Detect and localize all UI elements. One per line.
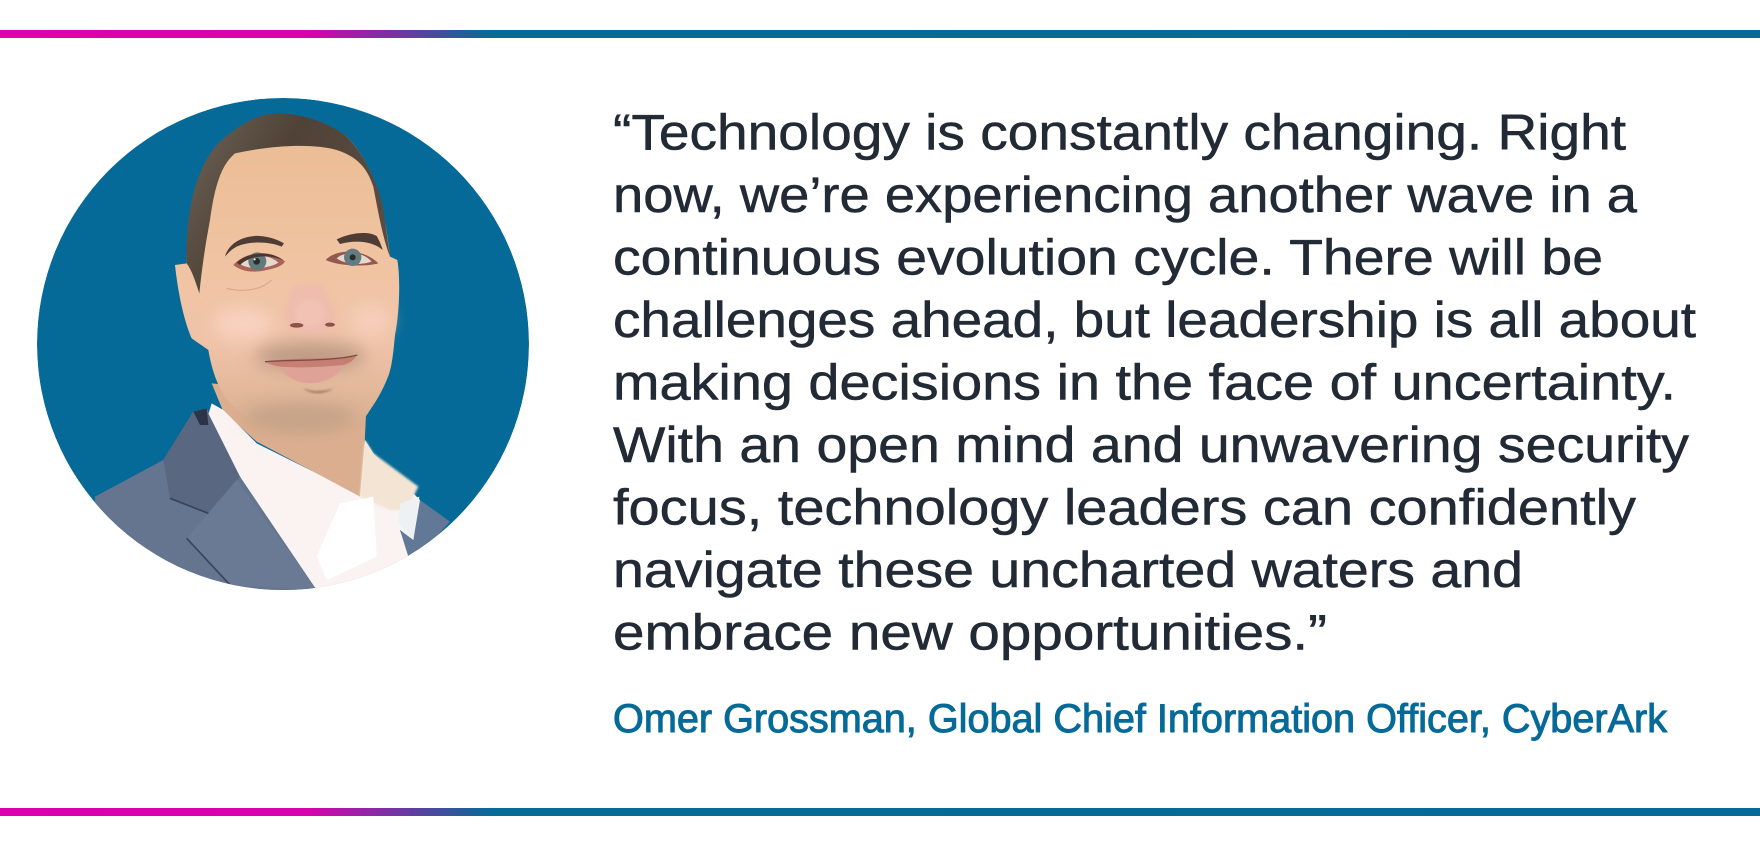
portrait photo in blue circle: [37, 98, 529, 607]
quote text: With an open mind and unwavering security: [613, 417, 1689, 473]
top gradient rule: [0, 30, 1760, 38]
attribution: Omer Grossman, Global Chief Information Officer, CyberArk: [613, 697, 1668, 741]
quote text: making decisions in the face of uncertainty.: [613, 354, 1676, 410]
quote text: navigate these uncharted waters and: [613, 542, 1523, 598]
quote text: now, we’re experiencing another wave in a: [613, 167, 1637, 223]
quote text: [613, 104, 1696, 660]
quote text: challenges ahead, but leadership is all about: [613, 292, 1696, 348]
quote text: embrace new opportunities.”: [613, 604, 1327, 660]
quote text: “Technology is constantly changing. Right: [613, 104, 1626, 160]
quote text: continuous evolution cycle. There will be: [613, 230, 1603, 286]
quote text: focus, technology leaders can confidently: [613, 480, 1636, 536]
bottom gradient rule: [0, 808, 1760, 816]
